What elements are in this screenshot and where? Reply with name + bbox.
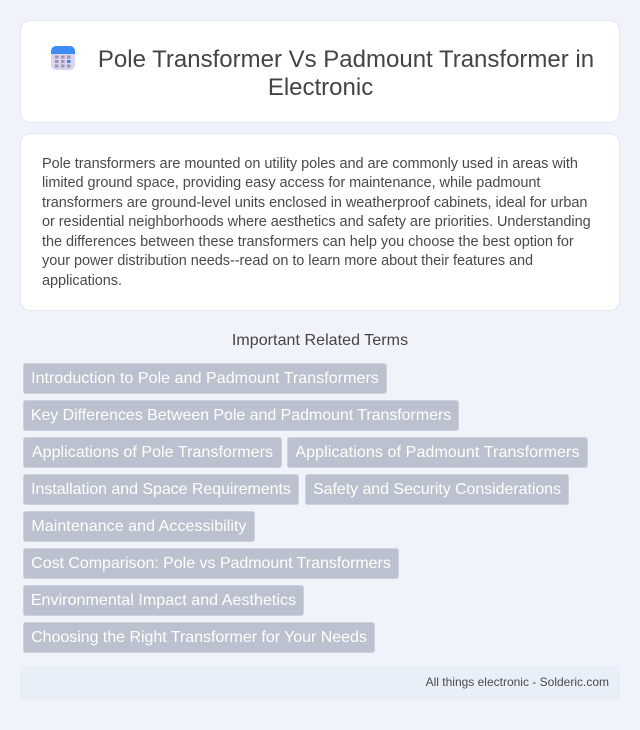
tag — [23, 622, 375, 653]
tag: Environmental Impact and Aesthetics — [31, 592, 296, 609]
heading: important related terms: Important Related Terms — [232, 332, 408, 349]
text block: intro paragraph: your power distribution needs--read on to learn more about their features and — [42, 253, 533, 269]
tag: Choosing the Right Transformer for Your Needs — [31, 629, 367, 646]
title second line: Electronic — [268, 74, 373, 101]
tag: Cost Comparison: Pole vs Padmount Transformers — [31, 555, 391, 572]
tag: Introduction to Pole and Padmount Transformers — [31, 370, 379, 387]
text block: intro paragraph: transformers are ground-level units enclosed in weatherproof cabinets, ideal for urban — [42, 195, 587, 211]
panel: title card — [20, 20, 620, 123]
title: Pole Transformer Vs Padmount Transformer in — [98, 46, 594, 73]
text block: intro paragraph: or residential neighborhoods where aesthetics and safety are priorities. Understanding — [42, 214, 591, 230]
icon: calendar app — [51, 46, 75, 70]
tag — [23, 548, 399, 579]
tag — [23, 437, 282, 468]
tag — [23, 511, 255, 542]
tag — [287, 437, 588, 468]
tag: Installation and Space Requirements — [31, 481, 291, 498]
tag: Applications of Pole Transformers — [32, 444, 273, 461]
footer bar — [20, 666, 620, 700]
panel: intro paragraph card — [20, 133, 620, 311]
tag: Maintenance and Accessibility — [31, 518, 247, 535]
text block: intro paragraph: the differences between these transformers can help you choose the best option for — [42, 234, 574, 250]
tag — [23, 474, 299, 505]
tag: Applications of Padmount Transformers — [295, 444, 580, 461]
text block: intro paragraph: limited ground space, providing easy access for maintenance, while padmount — [42, 175, 540, 191]
footer text: All things electronic - Solderic.com — [426, 675, 609, 689]
tag — [305, 474, 569, 505]
tag — [23, 400, 459, 431]
tag: Safety and Security Considerations — [313, 481, 561, 498]
tag: Key Differences Between Pole and Padmount Transformers — [31, 407, 451, 424]
text block: intro paragraph: applications. — [42, 273, 122, 289]
tag — [23, 585, 304, 616]
text block: intro paragraph: Pole transformers are mounted on utility poles and are commonly used in areas with — [42, 156, 578, 172]
tag — [23, 363, 387, 394]
text block: intro paragraph — [42, 156, 591, 289]
